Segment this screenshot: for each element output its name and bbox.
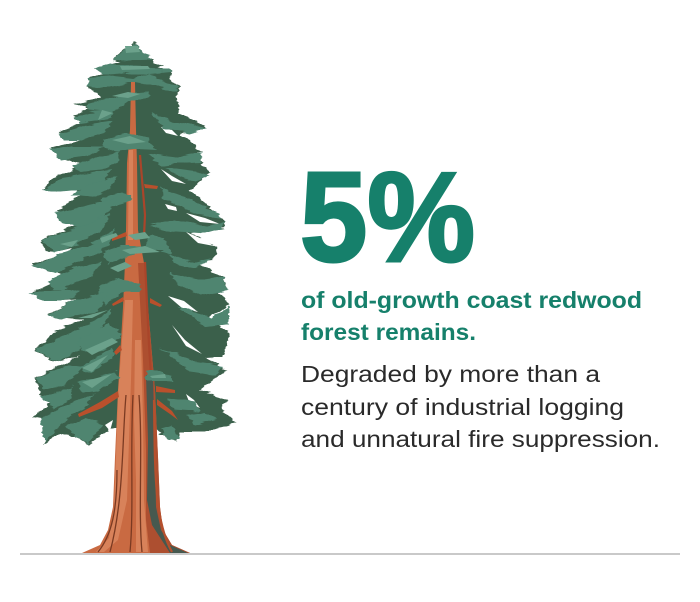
white gaps in foliage — [55, 127, 220, 431]
statistic caption: forest remains. — [301, 319, 476, 345]
trunk grey shade stripe — [146, 375, 188, 553]
body text: Degraded by more than a — [301, 361, 601, 387]
tree trunk — [82, 82, 190, 553]
body text: and unnatural fire suppression. — [301, 426, 660, 452]
foliage highlights — [60, 46, 166, 388]
trunk shadow side — [138, 263, 190, 553]
trunk bark grooves — [98, 395, 142, 552]
foliage clusters mid tone — [30, 44, 230, 444]
big statistic: 5% — [300, 146, 475, 288]
trunk light highlight — [96, 300, 133, 552]
statistic caption — [301, 287, 642, 345]
ground line — [20, 553, 680, 555]
statistic caption: of old-growth coast redwood — [301, 287, 642, 313]
redwood tree illustration — [30, 43, 237, 553]
body text — [301, 361, 660, 452]
side stem upper — [140, 155, 151, 375]
body text: century of industrial logging — [301, 394, 624, 420]
trunk orange stripe — [154, 400, 172, 552]
tree foliage dark mass — [32, 43, 237, 445]
trunk base colour — [82, 82, 190, 553]
exposed branches — [78, 184, 178, 420]
